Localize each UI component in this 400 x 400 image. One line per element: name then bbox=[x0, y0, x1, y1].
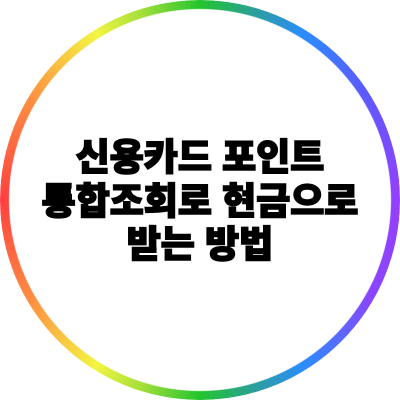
title: 통합조회로 현금으로 bbox=[42, 180, 358, 222]
title: 받는 방법 bbox=[127, 224, 273, 265]
title bbox=[42, 137, 358, 265]
title: 신용카드 포인트 bbox=[76, 137, 324, 178]
